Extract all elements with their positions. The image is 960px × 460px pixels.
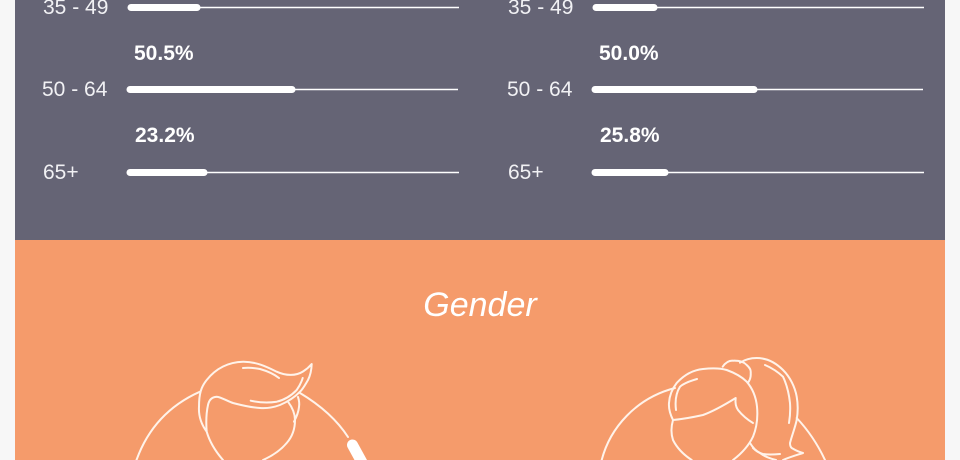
left column: 65+ row [43,124,459,184]
right column: 50-64 row: 50 - 64 [507,78,573,101]
icon: man [136,362,364,460]
right column: 50-64 row [507,42,923,101]
right column: 65+ row [508,124,924,184]
heading: Gender: Gender [423,286,538,324]
right column: 65+ row: 25.8% [600,124,660,147]
right column: 65+ row: 65+ [508,161,544,184]
icon: woman [602,358,825,460]
left column: 65+ row: 23.2% [135,124,195,147]
left column: 65+ row: 65+ [43,161,79,184]
icon: male gauge marker [352,445,364,460]
left column: 50-64 row: 50.5% [134,42,194,65]
left column: 50-64 row: 50 - 64 [42,78,108,101]
right column: 50-64 row: 50.0% [599,42,659,65]
panel: age [15,0,945,240]
panel: gender [15,240,945,460]
left column: 50-64 row [42,42,458,101]
